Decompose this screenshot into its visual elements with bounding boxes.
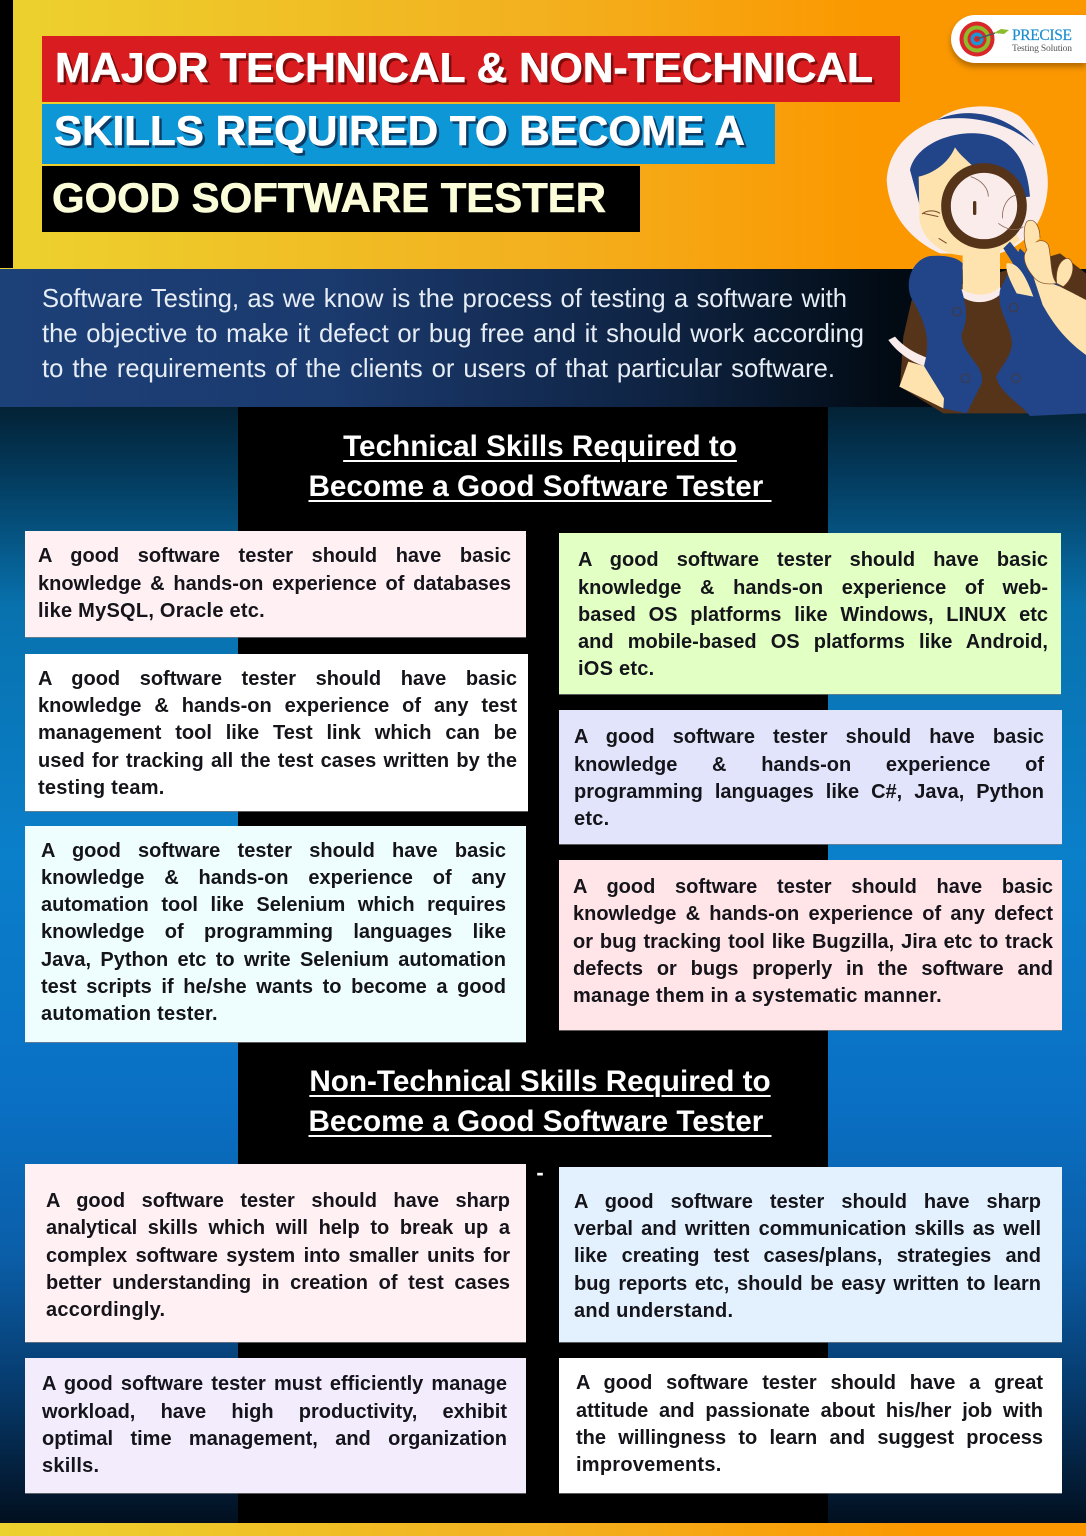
heading: technical skills (308, 430, 772, 503)
card: automation tool: Java, Python etc to write Selenium automation (41, 949, 506, 971)
title line 2: blue banner: SKILLS REQUIRED TO BECOME A (56, 110, 747, 156)
title line 3: black banner: GOOD SOFTWARE TESTER (52, 174, 606, 221)
intro paragraph: to the requirements of the clients or users of that particular software. (42, 355, 835, 383)
card: OS platforms: A good software tester should have basic (578, 549, 1048, 571)
lower section blue gradient background (0, 407, 1086, 1524)
card: automation tool: knowledge of programming languages like (41, 921, 506, 943)
intro paragraph (42, 285, 864, 383)
card: test management tool: testing team. (38, 777, 165, 799)
card: attitude (559, 1358, 1062, 1493)
card: defect tracking: knowledge & hands-on experience of any defect (573, 903, 1053, 925)
logo pill: Testing Solution (1012, 44, 1072, 54)
card: databases: A good software tester should have basic (38, 545, 511, 567)
heading: technical skills: Technical Skills Required to (343, 430, 737, 463)
card: attitude: A good software tester should have a great (576, 1372, 1043, 1394)
card: automation tool: automation tool like Selenium which requires (41, 894, 506, 916)
card: databases: like MySQL, Oracle etc. (38, 600, 265, 622)
magnifier and hand (946, 168, 1086, 355)
card: workload management: A good software tester must efficiently manage (42, 1373, 507, 1395)
card: automation tool: A good software tester should have basic (41, 840, 506, 862)
card: attitude: the willingness to learn and suggest process (576, 1427, 1043, 1449)
top banner background (0, 0, 1086, 269)
card: workload management: workload, have high productivity, exhibit (42, 1401, 507, 1423)
card: communication skills: bug reports etc, should be easy written to learn (574, 1273, 1041, 1295)
card: test management tool: knowledge & hands-on experience of any test (38, 695, 517, 717)
card: test management tool: management tool like Test link which can be (38, 722, 517, 744)
illustration: woman with magnifying glass (886, 106, 1086, 416)
card: OS platforms: knowledge & hands-on experience of web- (578, 577, 1048, 599)
intro paragraph: the objective to make it defect or bug free and it should work according (42, 320, 864, 348)
body (888, 243, 1086, 416)
title line 1: red banner (42, 36, 900, 102)
card: analytical skills: complex software system into smaller units for (46, 1245, 510, 1267)
card: analytical skills: accordingly. (46, 1299, 165, 1321)
card: attitude: attitude and passionate about his/her job with (576, 1400, 1043, 1422)
heading: technical skills: Become a Good Software Tester (308, 470, 763, 503)
intro band (0, 269, 1086, 407)
card: automation tool (25, 826, 526, 1042)
card: test management tool (25, 654, 528, 811)
card: analytical skills: analytical skills which will help to break up a (46, 1217, 510, 1239)
card: communication skills: like creating test cases/plans, strategies and (574, 1245, 1041, 1267)
card: OS platforms (559, 533, 1061, 694)
heading: non-technical skills: Non-Technical Skills Required to (309, 1065, 771, 1098)
card: communication skills: and understand. (574, 1300, 733, 1322)
card: test management tool: used for tracking all the test cases written by the (38, 750, 517, 772)
dash: - (536, 1160, 544, 1185)
card: workload management: skills. (42, 1455, 99, 1477)
title line 1: red banner: MAJOR TECHNICAL & NON-TECHNICAL (55, 44, 873, 91)
heading: non-technical skills (308, 1065, 772, 1138)
card: OS platforms: and mobile-based OS platforms like Android, (578, 631, 1048, 653)
bottom gradient stripe (0, 1523, 1086, 1536)
card: programming languages: A good software tester should have basic (574, 726, 1044, 748)
heading: non-technical skills: Become a Good Software Tester (308, 1105, 763, 1138)
card: defect tracking (559, 860, 1062, 1030)
central black column (238, 407, 828, 1524)
card: defect tracking: or bug tracking tool like Bugzilla, Jira etc to track (573, 931, 1053, 953)
card: programming languages: programming languages like C#, Java, Python (574, 781, 1044, 803)
logo pill (951, 15, 1086, 63)
card: OS platforms: based OS platforms like Windows, LINUX etc (578, 604, 1048, 626)
logo pill: PRECISE (1012, 27, 1072, 44)
hair and face (910, 133, 1030, 257)
card: defect tracking: defects or bugs properly in the software and (573, 958, 1053, 980)
card: databases (25, 531, 526, 637)
card: programming languages: knowledge & hands-on experience of (574, 754, 1044, 776)
card: automation tool: test scripts if he/she wants to become a good (41, 976, 506, 998)
card: databases: knowledge & hands-on experience of databases (38, 573, 511, 595)
card: analytical skills (25, 1164, 526, 1342)
title line 2: blue banner: SKILLS REQUIRED TO BECOME A (54, 107, 745, 154)
card: OS platforms: iOS etc. (578, 658, 654, 680)
card: analytical skills: better understanding in creation of test cases (46, 1272, 510, 1294)
intro paragraph: Software Testing, as we know is the process of testing a software with (42, 285, 847, 313)
card: automation tool: automation tester. (41, 1003, 218, 1025)
title line 3: black banner (42, 166, 640, 232)
card: workload management (25, 1358, 526, 1493)
card: programming languages: etc. (574, 808, 609, 830)
card: automation tool: knowledge & hands-on experience of any (41, 867, 506, 889)
card: analytical skills: A good software tester should have sharp (46, 1190, 510, 1212)
card: test management tool: A good software tester should have basic (38, 668, 517, 690)
hood (887, 106, 1048, 255)
card: communication skills (559, 1167, 1062, 1342)
card: defect tracking: manage them in a systematic manner. (573, 985, 942, 1007)
card: programming languages (559, 710, 1062, 844)
card: defect tracking: A good software tester should have basic (573, 876, 1053, 898)
title line 1: red banner: MAJOR TECHNICAL & NON-TECHNICAL (58, 46, 876, 94)
card: workload management: optimal time management, and organization (42, 1428, 507, 1450)
left black bar (0, 0, 13, 268)
card: attitude: improvements. (576, 1454, 722, 1476)
card: communication skills: A good software tester should have sharp (574, 1191, 1041, 1213)
card: communication skills: verbal and written communication skills as well (574, 1218, 1041, 1240)
